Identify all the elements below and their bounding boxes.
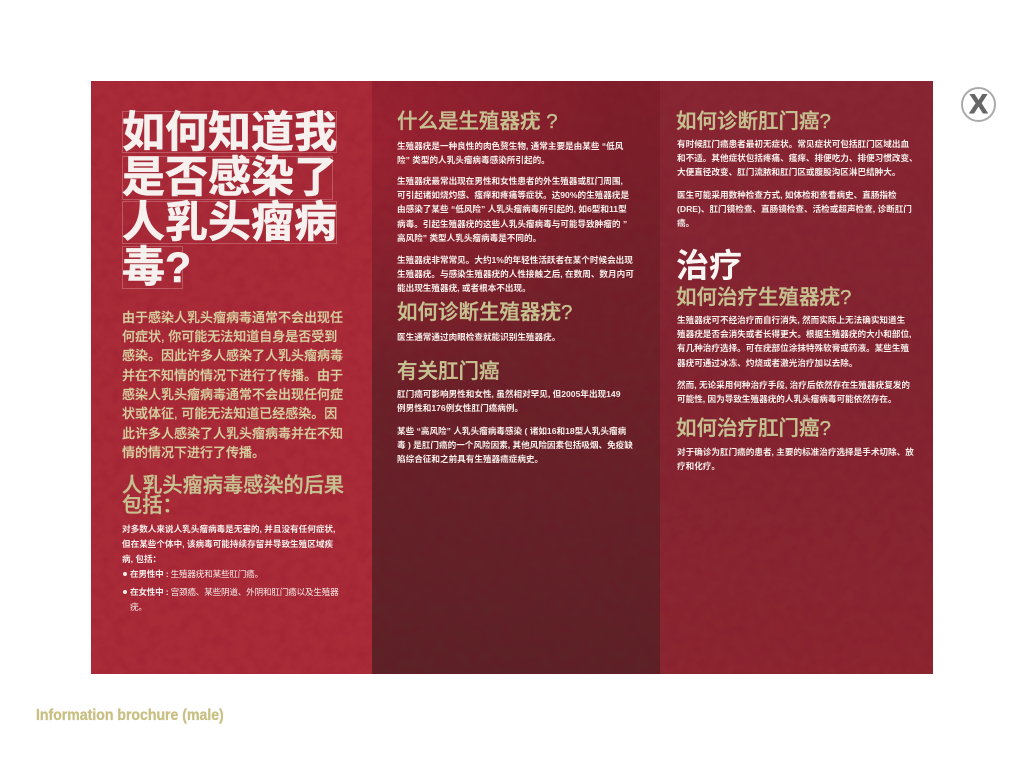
left intro text: 情的情况下进行了传播。 xyxy=(122,445,265,460)
treating genital warts paragraph 2 xyxy=(677,380,910,404)
treating genital warts paragraph 2: 然而, 无论采用何种治疗手段, 治疗后依然存在生殖器疣复发的 xyxy=(677,380,910,390)
genital warts paragraph 2 xyxy=(397,176,629,243)
bullet list xyxy=(123,569,339,612)
diagnosing anal cancer paragraph 1: 和不适。其他症状包括疼痛、瘙痒、排便吃力、排便习惯改变、 xyxy=(677,153,918,163)
title xyxy=(122,109,337,292)
bullet: women: 疣。 xyxy=(130,602,147,612)
genital warts paragraph 2: 可引起诸如烧灼感、瘙痒和疼痛等症状。达90%的生殖器疣是 xyxy=(397,190,629,200)
heading: consequences: 人乳头瘤病毒感染的后果 xyxy=(122,475,344,497)
genital warts paragraph 1: 生殖器疣是一种良性的肉色赘生物, 通常主要是由某些 “低风 xyxy=(397,141,623,151)
diagnosing anal cancer paragraph 2: (DRE)、肛门镜检查、直肠镜检查、活检或超声检查, 诊断肛门 xyxy=(677,204,912,214)
heading: treatment: 治疗 xyxy=(676,247,742,284)
genital warts paragraph 3 xyxy=(397,255,634,293)
background panel: textured red brochure xyxy=(91,81,933,674)
anal cancer paragraph 1: 肛门癌可影响男性和女性, 虽然相对罕见, 但2005年出现149 xyxy=(397,389,620,399)
heading: treating anal cancer: 如何治疗肛门癌? xyxy=(676,417,831,440)
treating genital warts paragraph 2: 可能性, 因为导致生殖器疣的人乳头瘤病毒可能依然存在。 xyxy=(677,394,897,404)
diagnosing anal cancer paragraph 2 xyxy=(677,190,912,228)
heading: consequences xyxy=(122,474,344,517)
bullet: men: 在男性中 : 生殖器疣和某些肛门癌。 xyxy=(130,569,263,579)
treating anal cancer text xyxy=(677,446,914,471)
treating genital warts paragraph 1: 生殖器疣可不经治疗而自行消失, 然而实际上无法确实知道生 xyxy=(677,315,905,325)
heading: diagnosing anal cancer: 如何诊断肛门癌? xyxy=(676,110,831,133)
genital warts paragraph 2: 病毒。引起生殖器疣的这些人乳头瘤病毒与可能导致肿瘤的 ” xyxy=(397,219,627,229)
heading: treating genital warts: 如何治疗生殖器疣? xyxy=(676,286,851,308)
genital warts paragraph 3: 生殖器疣。与感染生殖器疣的人性接触之后, 在数周、数月内可 xyxy=(397,269,634,279)
anal cancer paragraph 2 xyxy=(397,426,633,464)
title: 毒? xyxy=(122,244,191,292)
left intro text: 何症状, 你可能无法知道自身是否受到 xyxy=(122,329,337,344)
treating genital warts paragraph 1: 器疣可通过冰冻、灼烧或者激光治疗加以去除。 xyxy=(677,358,857,368)
anal cancer paragraph 2: 毒 ) 是肛门癌的一个风险因素, 其他风险因素包括吸烟、免疫缺 xyxy=(397,440,633,450)
left intro text: 感染。因此许多人感染了人乳头瘤病毒 xyxy=(122,348,343,363)
diagnosing anal cancer paragraph 1 xyxy=(677,139,918,177)
anal cancer paragraph 2: 陷综合征和之前具有生殖器癌症病史。 xyxy=(397,454,543,464)
diagnosing anal cancer paragraph 2: 医生可能采用数种检查方式, 如体检和查看病史、直肠指检 xyxy=(677,190,897,200)
treating genital warts paragraph 1: 殖器疣是否会消失或者长得更大。根据生殖器疣的大小和部位, xyxy=(677,329,911,339)
anal cancer paragraph 1 xyxy=(397,389,620,413)
left intro text xyxy=(122,310,343,460)
consequences text: 但在某些个体中, 该病毒可能持续存留并导致生殖区域疾 xyxy=(122,539,333,549)
consequences text: 病, 包括： xyxy=(122,554,161,564)
treating anal cancer text: 对于确诊为肛门癌的患者, 主要的标准治疗选择是手术切除、放 xyxy=(677,446,914,456)
genital warts paragraph 2: 生殖器疣最常出现在男性和女性患者的外生殖器或肛门周围, xyxy=(397,176,623,186)
left intro text: 此许多人感染了人乳头瘤病毒并在不知 xyxy=(122,426,343,441)
diagnosing anal cancer paragraph 2: 癌。 xyxy=(677,218,694,228)
diagnosing anal cancer paragraph 1: 有时候肛门癌患者最初无症状。常见症状可包括肛门区域出血 xyxy=(677,139,909,149)
genital warts paragraph 2: 高风险” 类型人乳头瘤病毒是不同的。 xyxy=(397,233,541,243)
icon: close button: X xyxy=(969,89,988,119)
anal cancer paragraph 1: 例男性和176例女性肛门癌病例。 xyxy=(397,403,523,413)
title: 是否感染了 xyxy=(122,154,337,202)
left intro text: 状或体征, 可能无法知道已经感染。因 xyxy=(122,406,337,421)
genital warts paragraph 1: 险” 类型的人乳头瘤病毒感染所引起的。 xyxy=(397,155,550,165)
heading: what are genital warts: 什么是生殖器疣 ? xyxy=(397,110,558,133)
consequences text xyxy=(122,524,335,564)
left intro text: 并在不知情的情况下进行了传播。由于 xyxy=(122,368,343,383)
genital warts paragraph 3: 能出现生殖器疣, 或者根本不出现。 xyxy=(397,283,531,293)
treating anal cancer text: 疗和化疗。 xyxy=(677,461,720,471)
left intro text: 由于感染人乳头瘤病毒通常不会出现任 xyxy=(122,310,343,325)
diagnosing genital warts text: 医生通常通过肉眼检查就能识别生殖器疣。 xyxy=(397,332,560,342)
genital warts paragraph 1 xyxy=(397,141,624,165)
title: 人乳头瘤病 xyxy=(122,199,337,247)
genital warts paragraph 3: 生殖器疣非常常见。大约1%的年轻性活跃者在某个时候会出现 xyxy=(397,255,633,265)
caption: Information brochure (male) xyxy=(36,707,224,724)
genital warts paragraph 2: 由感染了某些 “低风险” 人乳头瘤病毒所引起的, 如6型和11型 xyxy=(397,204,627,214)
icon: close button xyxy=(961,87,996,122)
treating genital warts paragraph 1: 有几种治疗选择。可在疣部位涂抹特殊软膏或药液。某些生殖 xyxy=(677,343,909,353)
title: 如何知道我 xyxy=(122,109,337,157)
left intro text: 感染人乳头瘤病毒通常不会出现任何症 xyxy=(122,387,343,402)
anal cancer paragraph 2: 某些 “高风险” 人乳头瘤病毒感染 ( 诸如16和18型人乳头瘤病 xyxy=(397,426,626,436)
bullet: women xyxy=(123,586,339,612)
heading: consequences: 包括： xyxy=(122,495,183,517)
bullet: women: 在女性中 : 宫颈癌、某些阴道、外阴和肛门癌以及生殖器 xyxy=(130,586,339,596)
heading: diagnosing genital warts: 如何诊断生殖器疣? xyxy=(397,301,572,324)
treating genital warts paragraph 1 xyxy=(677,315,911,368)
heading: about anal cancer: 有关肛门癌 xyxy=(397,360,500,382)
consequences text: 对多数人来说人乳头瘤病毒是无害的, 并且没有任何症状, xyxy=(122,524,335,534)
diagnosing anal cancer paragraph 1: 大便直径改变、肛门流脓和肛门区或腹股沟区淋巴结肿大。 xyxy=(677,167,900,177)
